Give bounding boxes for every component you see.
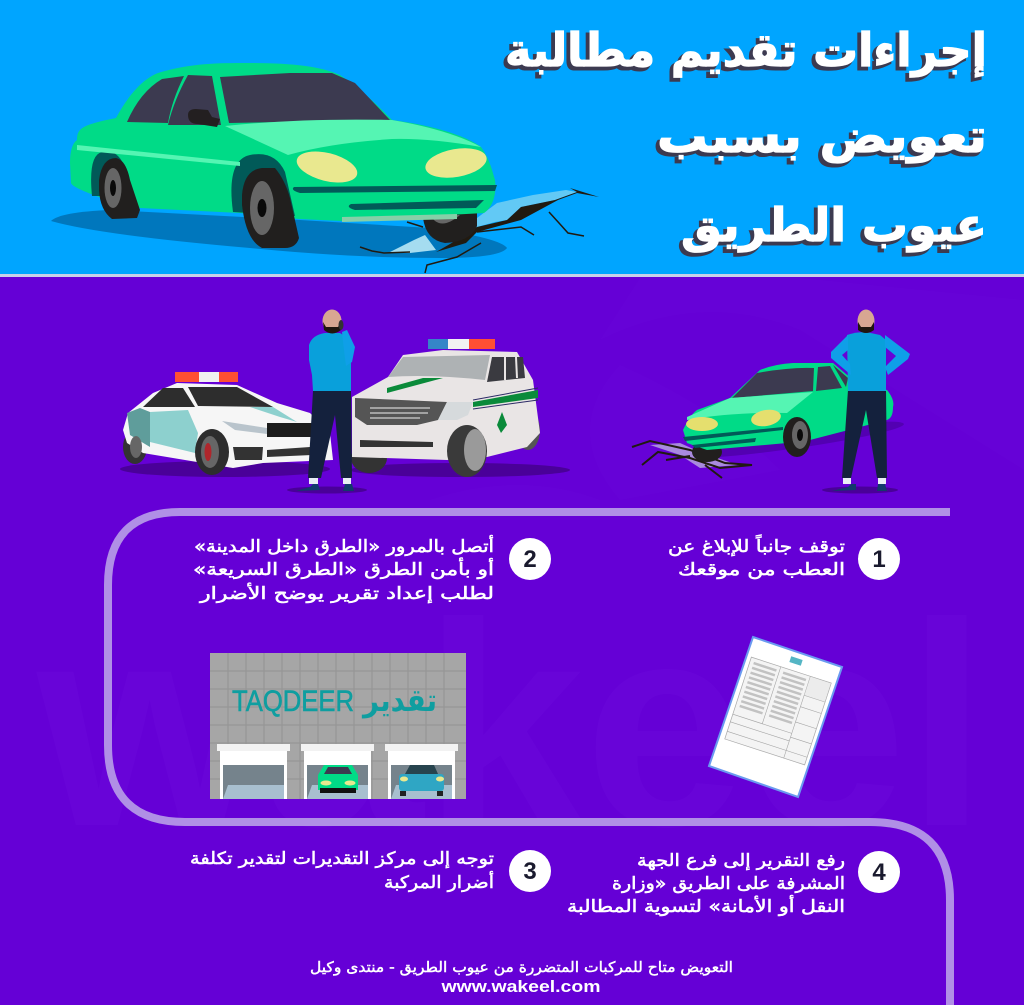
number badge 3: 3 — [523, 858, 537, 885]
number badge 4 — [858, 851, 900, 893]
title: عيوب الطريق — [678, 201, 984, 255]
step 1 text: توقف جانباً للإبلاغ عن — [668, 533, 845, 557]
number badge 3 — [509, 850, 551, 892]
title: تعويض بسبب — [654, 112, 984, 166]
step 3 text: أضرار المركبة — [384, 871, 494, 893]
sign text — [232, 683, 437, 719]
title: إجراءات تقديم مطالبة — [502, 26, 984, 81]
step 2 text: لطلب إعداد تقرير يوضح الأضرار — [199, 583, 494, 604]
road crack — [360, 188, 599, 273]
step 4 — [567, 851, 900, 917]
man on phone — [287, 310, 367, 494]
illustration: green car on cracked road — [51, 63, 599, 273]
step 3 text — [190, 849, 494, 893]
footer: www.wakeel.com — [440, 977, 600, 996]
number badge 2 — [509, 538, 551, 580]
step 4 text: رفع التقرير إلى فرع الجهة — [637, 851, 845, 871]
number badge 1: 1 — [872, 546, 886, 573]
step 4 text — [567, 851, 845, 917]
garage door green car — [301, 744, 374, 799]
step 4 text: النقل أو الأمانة» لتسوية المطالبة — [567, 895, 845, 917]
footer — [310, 960, 733, 996]
garage door blue car — [385, 744, 458, 799]
car and crack — [632, 363, 905, 478]
illustration: taqdeer centre building — [210, 653, 466, 799]
header band — [0, 0, 1024, 275]
title: إجراءات تقديم مطالبة — [505, 23, 987, 78]
step 2 text — [193, 535, 494, 604]
title: تعويض بسبب — [657, 109, 987, 163]
connecting path — [108, 512, 950, 1005]
illustration: man beside car on cracked road — [632, 310, 910, 494]
sign text: TAQDEER — [232, 685, 354, 718]
step 3 text: توجه إلى مركز التقديرات لتقدير تكلفة — [190, 849, 494, 869]
step 4 text: المشرفة على الطريق «وزارة — [612, 874, 845, 894]
number badge 2: 2 — [523, 546, 537, 573]
illustration: report document — [709, 637, 842, 797]
title — [502, 23, 987, 255]
watermark background — [32, 278, 1024, 887]
footer: التعويض متاح للمركبات المتضررة من عيوب الطريق - منتدى وكيل — [310, 960, 733, 976]
number badge 4: 4 — [872, 859, 886, 886]
sign text: تقدير — [361, 683, 437, 719]
number badge 1 — [858, 538, 900, 580]
step 2 text: أتصل بالمرور «الطرق داخل المدينة» — [194, 535, 494, 557]
step 1 text — [668, 533, 845, 580]
garage door empty — [217, 744, 290, 799]
title: عيوب الطريق — [681, 198, 987, 252]
standing man — [822, 310, 910, 494]
police car left — [120, 372, 333, 477]
step 1 text: العطب من موقعك — [678, 560, 845, 580]
watermark background: wakeel — [32, 563, 987, 887]
police car right — [350, 339, 570, 477]
step 2 — [193, 535, 551, 604]
step 2 text: أو بأمن الطرق «الطرق السريعة» — [193, 557, 494, 580]
step 1 — [668, 533, 900, 580]
step 3 — [190, 849, 551, 893]
illustration: man with police cars — [120, 310, 570, 494]
